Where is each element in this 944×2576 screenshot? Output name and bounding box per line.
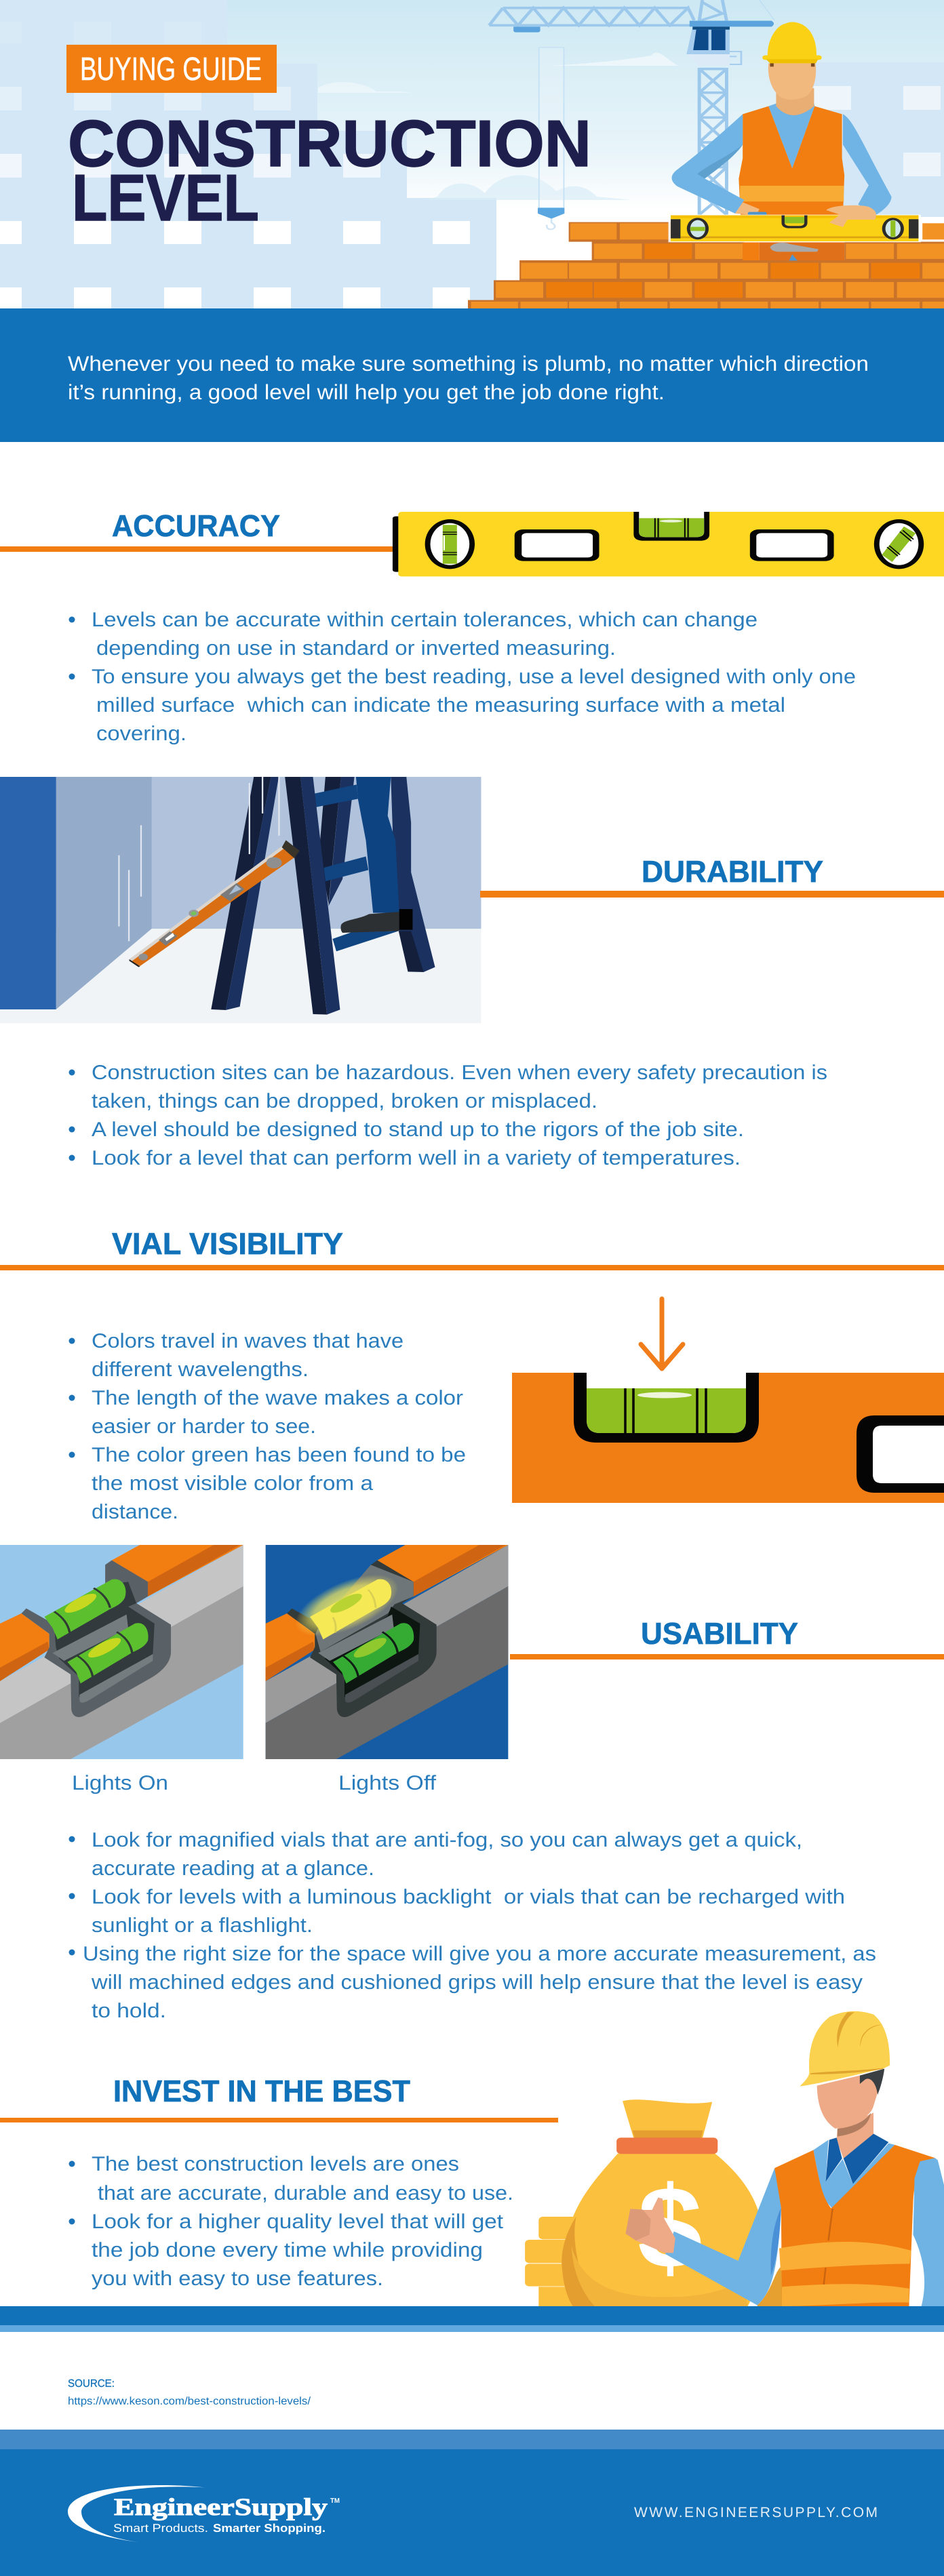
footer	[0, 2430, 944, 2576]
heading: durability: DURABILITY	[642, 854, 823, 889]
accuracy bullet list: depending on use in standard or inverted measuring.	[96, 637, 616, 660]
worker with level	[668, 22, 921, 242]
section: usability	[69, 1616, 944, 2022]
crane hook	[538, 47, 564, 229]
usability bullet list: Look for magnified vials that are anti-fog, so you can always get a quick,	[92, 1829, 802, 1851]
usability bullet list: to hold.	[92, 2000, 166, 2022]
durability bullet list: A level should be designed to stand up to the rigors of the job site.	[92, 1119, 744, 1141]
durability bullet list: Construction sites can be hazardous. Even when every safety precaution is	[92, 1062, 827, 1084]
logo: EngineerSupply	[68, 2485, 340, 2542]
usability bullet list: Using the right size for the space will give you a more accurate measurement, as	[83, 1943, 876, 1965]
title: LEVEL	[72, 161, 259, 235]
section: accuracy	[0, 508, 944, 745]
caption: lights off: Lights Off	[338, 1772, 437, 1794]
illustration: money bag and worker	[525, 2011, 944, 2306]
invest bullet list: you with easy to use features.	[92, 2268, 383, 2290]
source: https://www.keson.com/best-construction-levels/	[68, 2396, 311, 2407]
invest bullet list	[69, 2153, 513, 2290]
heading: usability: USABILITY	[641, 1616, 798, 1651]
vial visibility bullet list: Colors travel in waves that have	[92, 1330, 404, 1352]
caption: lights on: Lights On	[72, 1772, 168, 1794]
illustration: lights on	[0, 1545, 243, 1759]
logo: EngineerSupply: EngineerSupply	[114, 2493, 328, 2520]
usability bullet list: accurate reading at a glance.	[92, 1857, 374, 1880]
accuracy bullet list: To ensure you always get the best reading, use a level designed with only one	[92, 666, 856, 688]
badge: buying guide	[66, 45, 277, 93]
title	[68, 106, 591, 235]
logo: EngineerSupply: Smart Products.	[113, 2522, 208, 2535]
durability bullet list: taken, things can be dropped, broken or misplaced.	[92, 1090, 597, 1112]
vial visibility bullet list	[69, 1330, 466, 1523]
heading: invest in the best: INVEST IN THE BEST	[113, 2074, 410, 2108]
section: invest in the best	[0, 2011, 944, 2306]
vial visibility bullet list: distance.	[92, 1501, 178, 1523]
intro band: it’s running, a good level will help you get the job done right.	[68, 380, 665, 404]
vial visibility bullet list: The color green has been found to be	[92, 1444, 466, 1466]
invest bullet list: The best construction levels are ones	[92, 2153, 459, 2175]
vial visibility bullet list: the most visible color from a	[92, 1472, 373, 1495]
durability bullet list	[69, 1062, 827, 1169]
section: vial visibility	[0, 1226, 944, 1794]
divider bar	[0, 2306, 944, 2332]
background buildings	[0, 0, 944, 308]
logo: EngineerSupply: Smarter Shopping.	[213, 2522, 326, 2535]
badge: buying guide: BUYING GUIDE	[80, 52, 262, 87]
usability bullet list: will machined edges and cushioned grips will help ensure that the level is easy	[91, 1971, 863, 1994]
heading: accuracy: ACCURACY	[112, 508, 280, 543]
vial visibility bullet list: The length of the wave makes a color	[92, 1387, 463, 1409]
accuracy bullet list	[69, 609, 856, 745]
arrow pointing at vial	[641, 1299, 683, 1369]
heading: vial visibility: VIAL VISIBILITY	[112, 1226, 343, 1261]
usability bullet list: Look for levels with a luminous backlight or vials that can be recharged with	[92, 1886, 845, 1908]
logo: EngineerSupply: TM	[330, 2497, 340, 2505]
crane	[489, 0, 774, 215]
invest bullet list: Look for a higher quality level that will get	[92, 2211, 504, 2233]
usability bullet list	[69, 1829, 876, 2022]
usability bullet list: sunlight or a flashlight.	[92, 1914, 313, 1937]
invest bullet list: that are accurate, durable and easy to use.	[98, 2182, 513, 2205]
source	[68, 2378, 311, 2407]
hero banner	[0, 0, 944, 308]
accuracy bullet list: milled surface which can indicate the measuring surface with a metal	[96, 694, 785, 717]
accuracy bullet list: Levels can be accurate within certain tolerances, which can change	[92, 609, 758, 631]
illustration: ladder and dropped level	[0, 777, 481, 1023]
vial visibility bullet list: different wavelengths.	[92, 1359, 309, 1381]
source: SOURCE:	[68, 2378, 115, 2390]
intro band	[0, 308, 944, 442]
durability bullet list: Look for a level that can perform well in a variety of temperatures.	[92, 1147, 741, 1169]
illustration: orange level close-up	[512, 1373, 944, 1503]
illustration: lights off	[266, 1545, 508, 1759]
brick wall	[468, 222, 944, 308]
illustration: yellow level	[393, 512, 944, 576]
title: CONSTRUCTION	[68, 106, 591, 180]
dollar sign: $	[637, 2162, 703, 2293]
invest bullet list: the job done every time while providing	[92, 2239, 483, 2261]
website: WWW.ENGINEERSUPPLY.COM	[634, 2505, 878, 2520]
section: durability	[0, 777, 944, 1169]
intro band: Whenever you need to make sure something is plumb, no matter which direction	[68, 352, 869, 376]
accuracy bullet list: covering.	[96, 723, 186, 745]
vial visibility bullet list: easier or harder to see.	[92, 1415, 316, 1438]
